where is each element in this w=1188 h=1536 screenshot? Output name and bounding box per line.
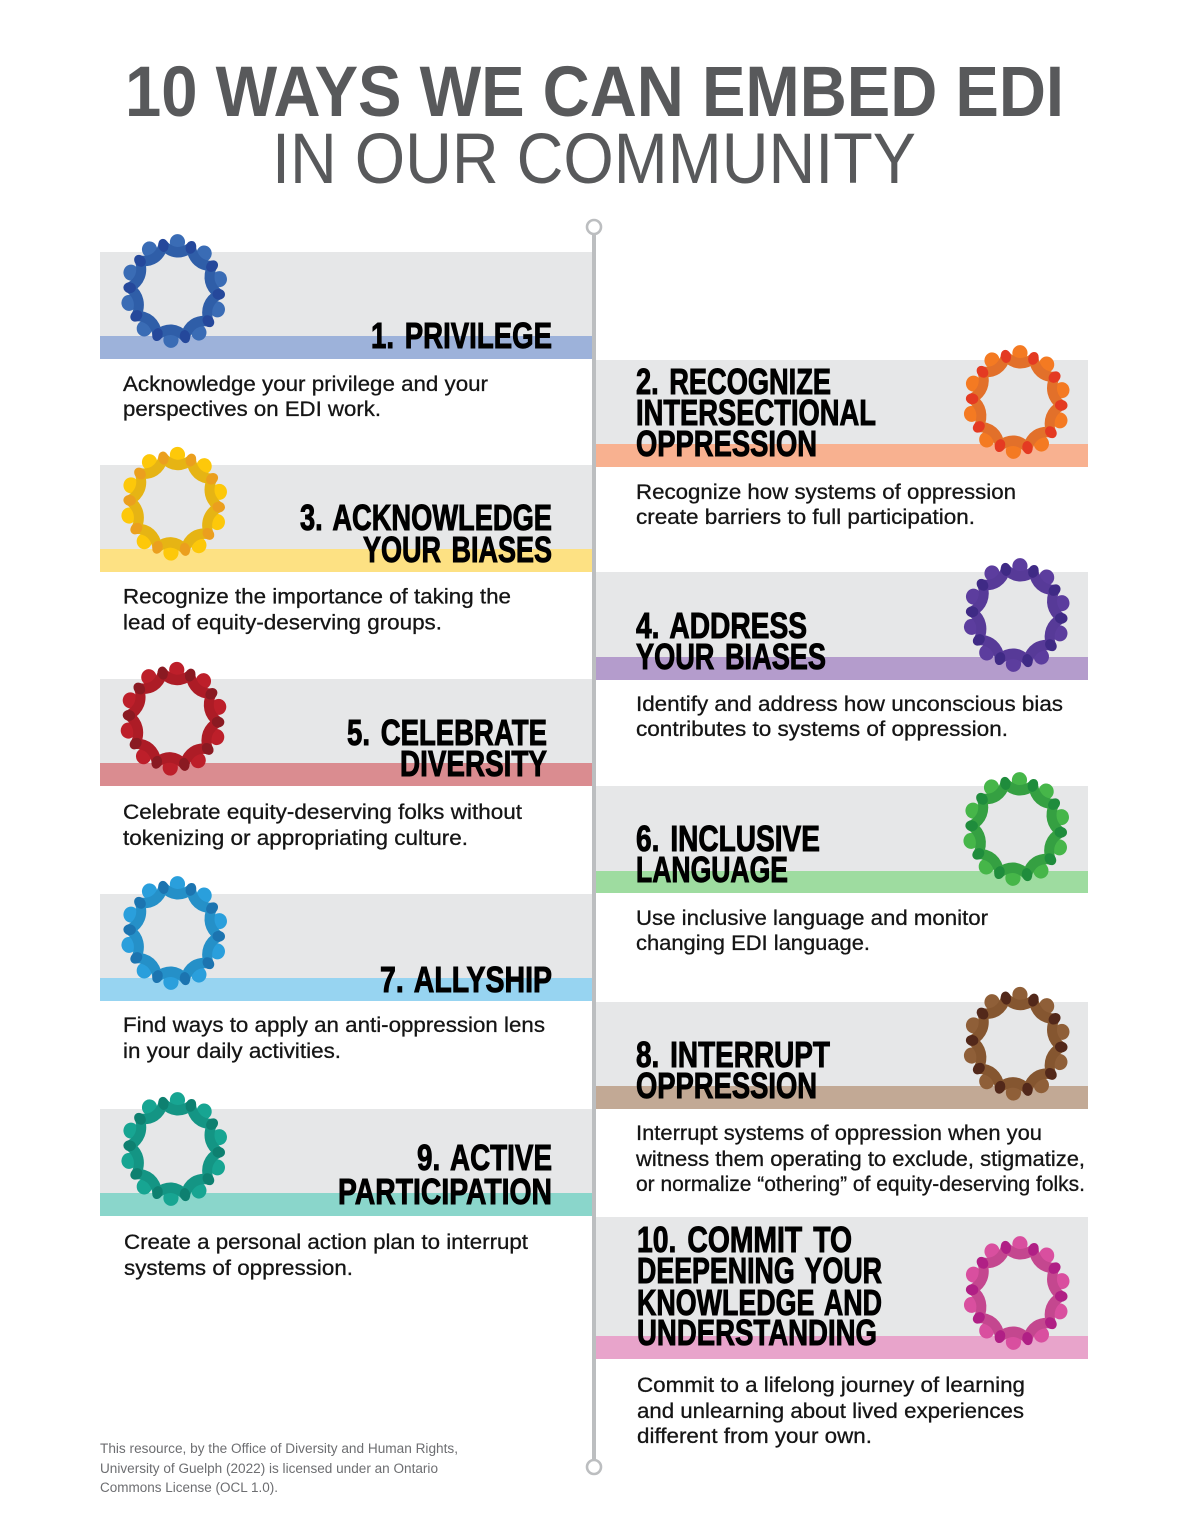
text: 2	[636, 481, 1016, 529]
panel: 9 active participation	[100, 1092, 592, 1280]
text: 7	[123, 1014, 545, 1063]
heading: 2: OPPRESSION	[636, 423, 817, 464]
heading: 4: 4. ADDRESS	[636, 605, 807, 646]
text: 7: Find ways to apply an anti-oppression lens	[123, 1014, 545, 1037]
text: 5: Celebrate equity-deserving folks without	[123, 801, 522, 824]
footer credit	[100, 1441, 458, 1495]
text: 6: Use inclusive language and monitor	[636, 907, 988, 930]
heading: 8: 8. INTERRUPT	[636, 1034, 830, 1075]
heading: 6: LANGUAGE	[636, 849, 788, 890]
heading: 2: INTERSECTIONAL	[636, 392, 876, 433]
heading: 2: 2. RECOGNIZE	[636, 361, 831, 402]
heading: 5: DIVERSITY	[400, 743, 547, 784]
footer credit: Commons License (OCL 1.0).	[100, 1480, 278, 1495]
icon: sky blue circle of people	[120, 876, 229, 990]
heading: 3: 3. ACKNOWLEDGE	[300, 497, 552, 538]
text: 5	[123, 801, 522, 850]
heading: 5: 5. CELEBRATE	[347, 712, 547, 753]
panel: 2 recognize intersectional oppression	[596, 345, 1088, 529]
text: 8: or normalize “othering” of equity-deserving folks.	[636, 1173, 1085, 1196]
icon: orange circle of people	[962, 345, 1071, 459]
heading: 10	[637, 1219, 882, 1353]
heading: 10: KNOWLEDGE AND	[637, 1282, 882, 1323]
icon: teal circle of people	[120, 1092, 229, 1206]
heading: 3: YOUR BIASES	[363, 529, 552, 570]
text: 8: witness them operating to exclude, stigmatize,	[635, 1148, 1085, 1171]
text: 4	[636, 693, 1063, 741]
heading: 8	[636, 1034, 830, 1106]
text: 10: and unlearning about lived experiences	[637, 1400, 1024, 1423]
text: 1: Acknowledge your privilege and your	[123, 373, 488, 396]
icon: red circle of people	[119, 661, 228, 776]
title	[125, 53, 1064, 199]
footer credit: University of Guelph (2022) is licensed under an Ontario	[100, 1461, 438, 1476]
heading: 9: 9. ACTIVE	[417, 1137, 552, 1178]
text: 10: Commit to a lifelong journey of learning	[637, 1374, 1025, 1397]
text: 6: changing EDI language.	[636, 932, 870, 955]
text: 1: perspectives on EDI work.	[123, 398, 381, 421]
heading: 2	[636, 361, 876, 464]
title: IN OUR COMMUNITY	[272, 120, 916, 199]
central timeline	[587, 220, 601, 1474]
icon: green circle of people	[962, 772, 1071, 886]
text: 8	[635, 1122, 1085, 1196]
text: 10	[637, 1374, 1025, 1448]
panel: 3 acknowledge your biases	[100, 446, 592, 634]
text: 2: create barriers to full participation.	[636, 506, 975, 529]
heading: 6: 6. INCLUSIVE	[636, 818, 820, 859]
text: 7: in your daily activities.	[123, 1040, 341, 1063]
heading: 4	[636, 605, 826, 677]
heading: 10: DEEPENING YOUR	[637, 1250, 882, 1291]
panel: 5 celebrate diversity	[100, 661, 592, 850]
heading: 9: PARTICIPATION	[338, 1171, 552, 1212]
icon: purple circle of people	[962, 558, 1071, 672]
text: 1	[123, 373, 488, 421]
heading: 7: 7. ALLYSHIP	[380, 959, 552, 1000]
text: 8: Interrupt systems of oppression when you	[636, 1122, 1042, 1145]
heading: 10: UNDERSTANDING	[637, 1312, 877, 1353]
text: 3: Recognize the importance of taking the	[123, 586, 511, 608]
heading: 6	[636, 818, 820, 890]
panel: 8 interrupt oppression	[596, 986, 1088, 1196]
panel: 1 privilege	[100, 234, 592, 421]
icon: blue circle of people	[120, 234, 229, 348]
heading: 1: 1. PRIVILEGE	[371, 315, 552, 356]
text: 6	[636, 907, 988, 955]
text: 3: lead of equity-deserving groups.	[123, 612, 442, 634]
heading: 10: 10. COMMIT TO	[637, 1219, 852, 1260]
panel: 6 inclusive language	[596, 772, 1088, 955]
text: 4: contributes to systems of oppression.	[636, 718, 1008, 741]
panel: 10 commit to deepening	[596, 1217, 1088, 1448]
text: 9	[124, 1231, 528, 1280]
text: 3	[123, 586, 511, 634]
text: 2: Recognize how systems of oppression	[636, 481, 1016, 504]
heading: 8: OPPRESSION	[636, 1065, 817, 1106]
heading: 5	[347, 712, 547, 784]
footer credit: This resource, by the Office of Diversity and Human Rights,	[100, 1441, 458, 1456]
title: 10 WAYS WE CAN EMBED EDI	[125, 53, 1064, 132]
text: 9: systems of oppression.	[124, 1257, 353, 1280]
icon: brown circle of people	[962, 986, 1071, 1101]
text: 4: Identify and address how unconscious bias	[636, 693, 1063, 716]
heading: 9	[338, 1137, 552, 1212]
panel: 4 address your biases	[596, 558, 1088, 741]
text: 10: different from your own.	[637, 1425, 872, 1448]
text: 9: Create a personal action plan to interrupt	[124, 1231, 528, 1254]
icon: pink circle of people	[962, 1236, 1071, 1350]
heading: 3	[300, 497, 552, 570]
icon: yellow circle of people	[120, 446, 229, 561]
text: 5: tokenizing or appropriating culture.	[123, 827, 468, 850]
heading: 4: YOUR BIASES	[636, 636, 826, 677]
panel: 7 allyship	[100, 876, 592, 1063]
